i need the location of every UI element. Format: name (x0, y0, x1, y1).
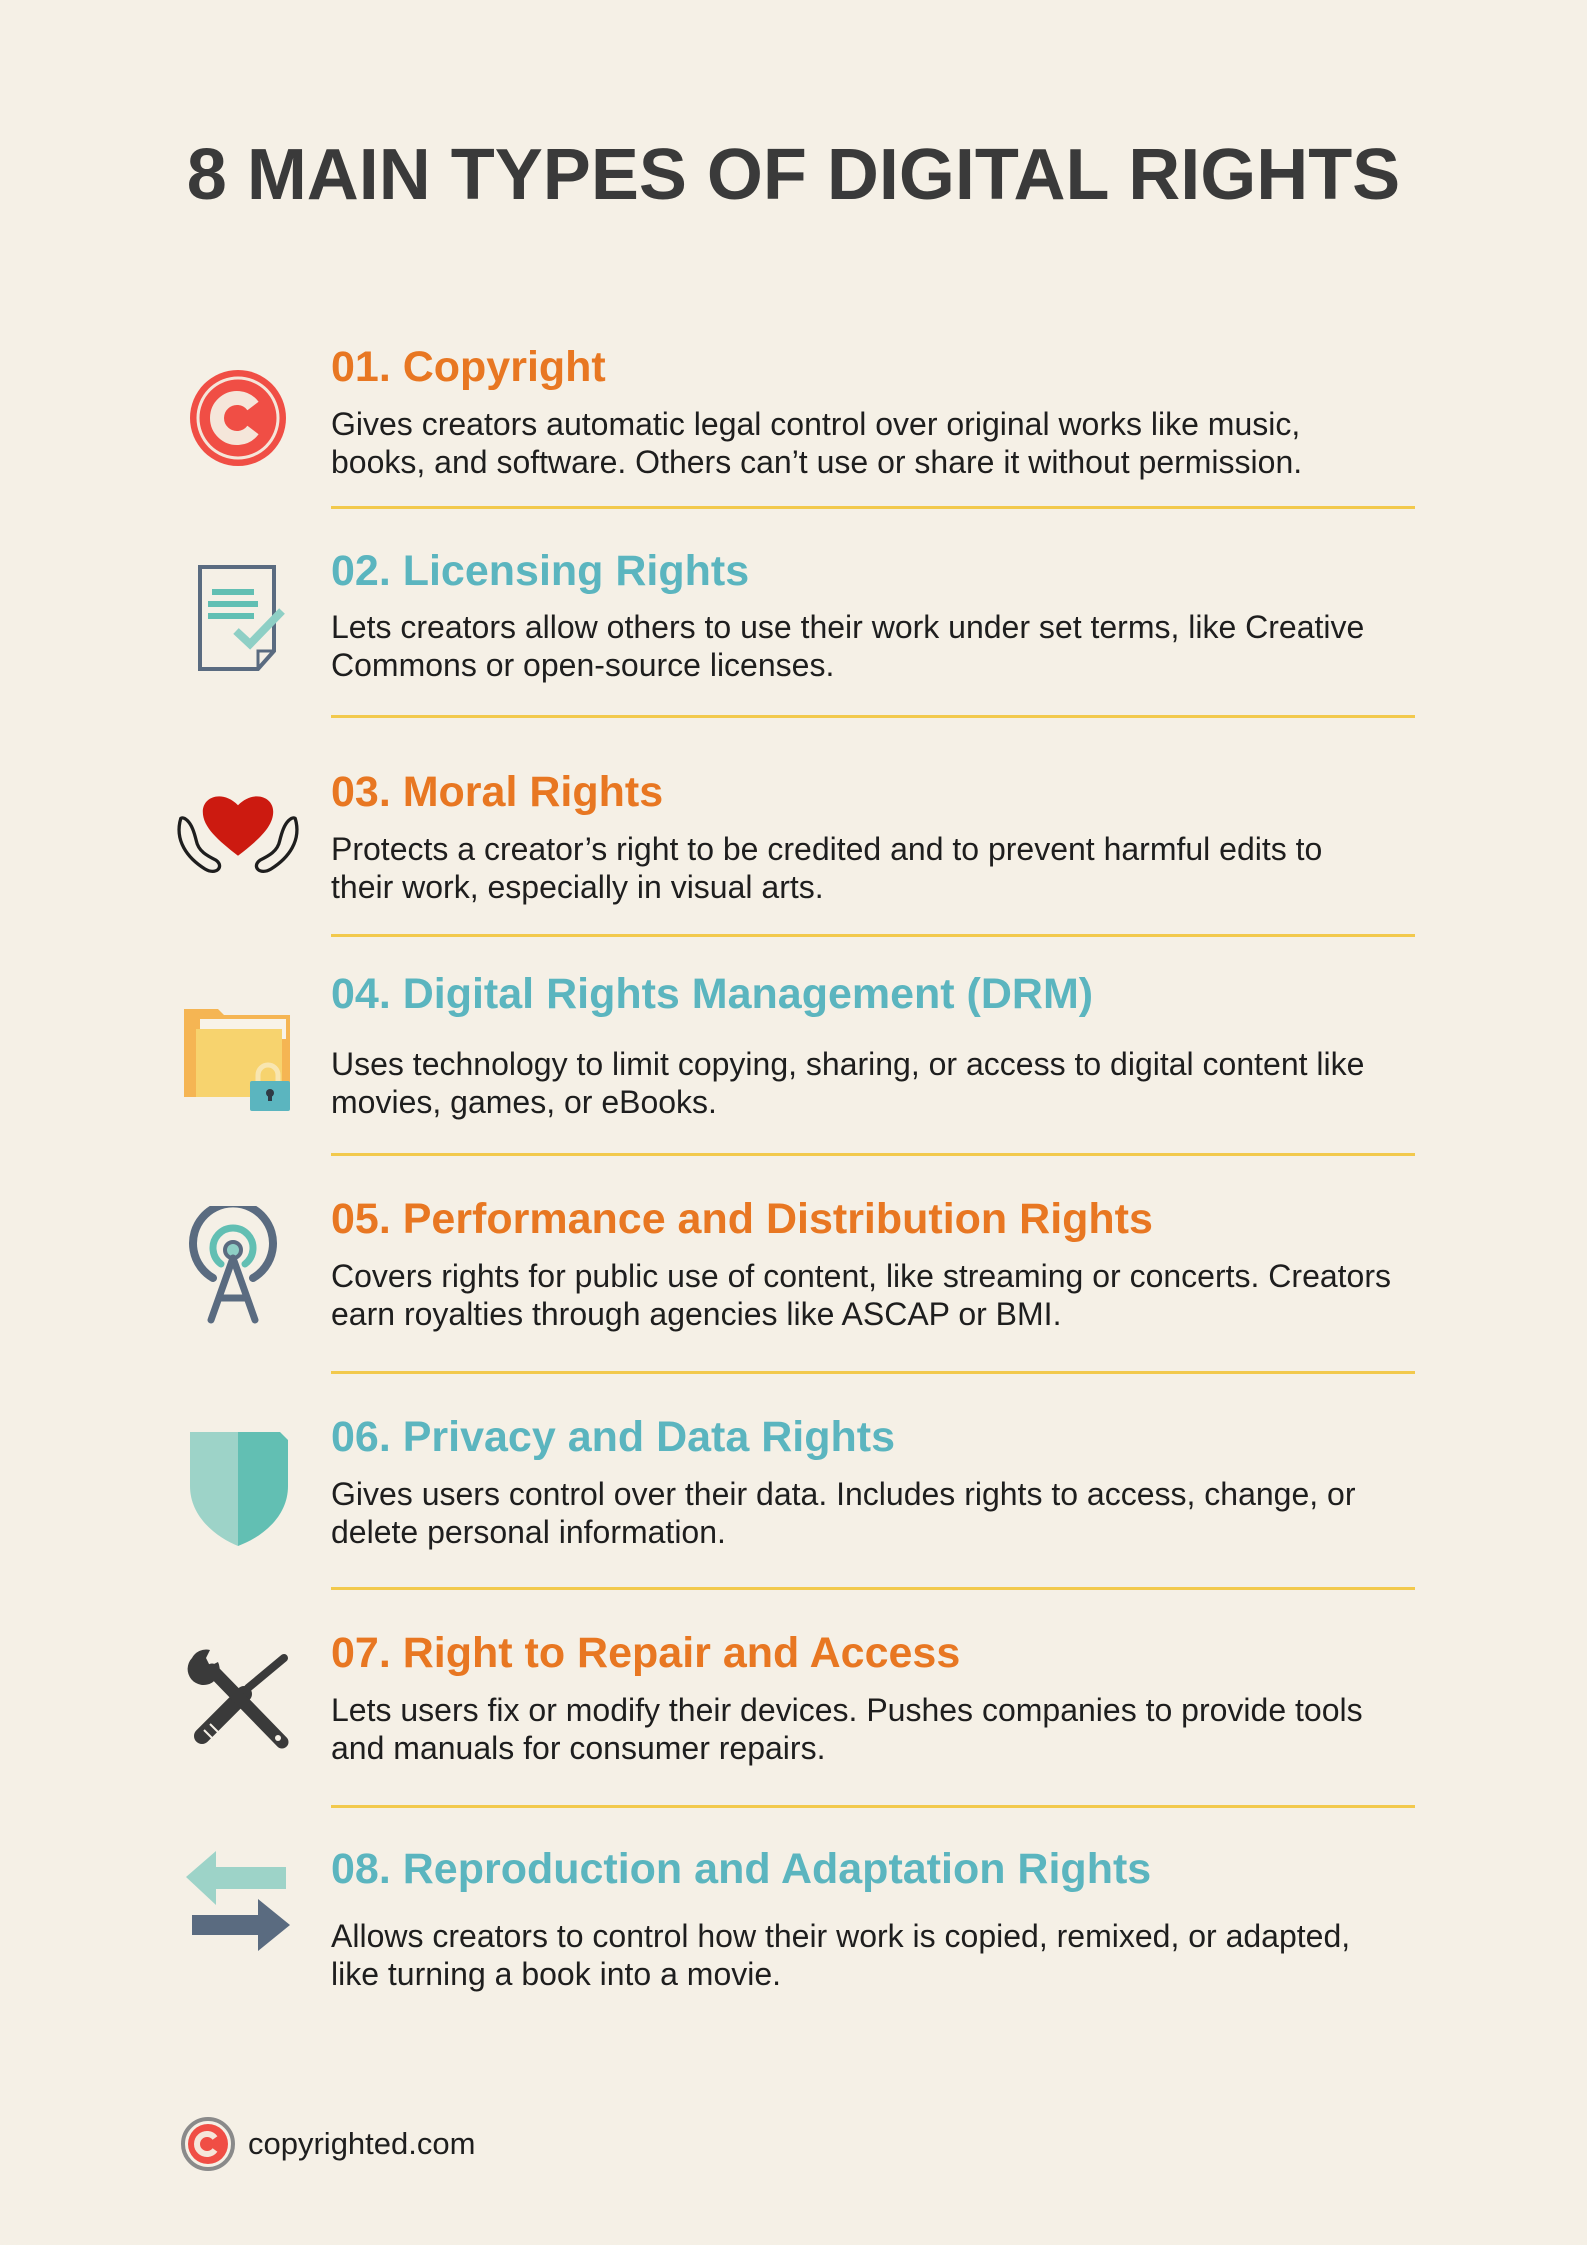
heading 04: 04. Digital Rights Management (DRM) (331, 970, 1093, 1018)
heading 08: 08. Reproduction and Adaptation Rights (331, 1845, 1151, 1893)
icon: broadcast tower (189, 1206, 277, 1324)
text 07 (331, 1692, 1363, 1766)
text 04 (331, 1046, 1364, 1120)
text 06: delete personal information. (331, 1514, 726, 1550)
text 04: movies, games, or eBooks. (331, 1084, 717, 1120)
text 08: Allows creators to control how their work is copied, remixed, or adapted, (331, 1918, 1350, 1954)
footer (181, 2117, 475, 2171)
text 02: Commons or open-source licenses. (331, 647, 834, 683)
heading 07: 07. Right to Repair and Access (331, 1629, 960, 1677)
text 03: their work, especially in visual arts. (331, 869, 824, 905)
icon: locked folder (184, 1009, 290, 1111)
icon: license document (198, 565, 285, 671)
text 08: like turning a book into a movie. (331, 1956, 781, 1992)
text 03: Protects a creator’s right to be credited and to prevent harmful edits to (331, 831, 1322, 867)
text 06: Gives users control over their data. Includes rights to access, change, or (331, 1476, 1356, 1512)
icon: arrows (186, 1851, 290, 1951)
text 01 (331, 406, 1302, 480)
text 01: books, and software. Others can’t use or share it without permission. (331, 444, 1302, 480)
icon: copyright (190, 370, 286, 466)
icon: heart in hands (177, 796, 299, 873)
text 02 (331, 609, 1364, 683)
footer: copyrighted.com (248, 2126, 475, 2161)
text 08 (331, 1918, 1350, 1992)
heading 05: 05. Performance and Distribution Rights (331, 1195, 1153, 1243)
text 04: Uses technology to limit copying, sharing, or access to digital content like (331, 1046, 1364, 1082)
text 01: Gives creators automatic legal control over original works like music, (331, 406, 1300, 442)
text 07: and manuals for consumer repairs. (331, 1730, 825, 1766)
text 03 (331, 831, 1322, 905)
heading 02: 02. Licensing Rights (331, 547, 749, 595)
text 05: earn royalties through agencies like ASCAP or BMI. (331, 1296, 1061, 1332)
icon: shield (190, 1432, 288, 1546)
heading 06: 06. Privacy and Data Rights (331, 1413, 895, 1461)
text 02: Lets creators allow others to use their work under set terms, like Creative (331, 609, 1364, 645)
text 05: Covers rights for public use of content, like streaming or concerts. Creators (331, 1258, 1391, 1294)
text 06 (331, 1476, 1356, 1550)
heading 01: 01. Copyright (331, 343, 606, 391)
icon: tools (188, 1650, 288, 1748)
text 07: Lets users fix or modify their devices. Pushes companies to provide tools (331, 1692, 1363, 1728)
heading 03: 03. Moral Rights (331, 768, 663, 816)
title: 8 MAIN TYPES OF DIGITAL RIGHTS (187, 135, 1400, 215)
text 05 (331, 1258, 1391, 1332)
